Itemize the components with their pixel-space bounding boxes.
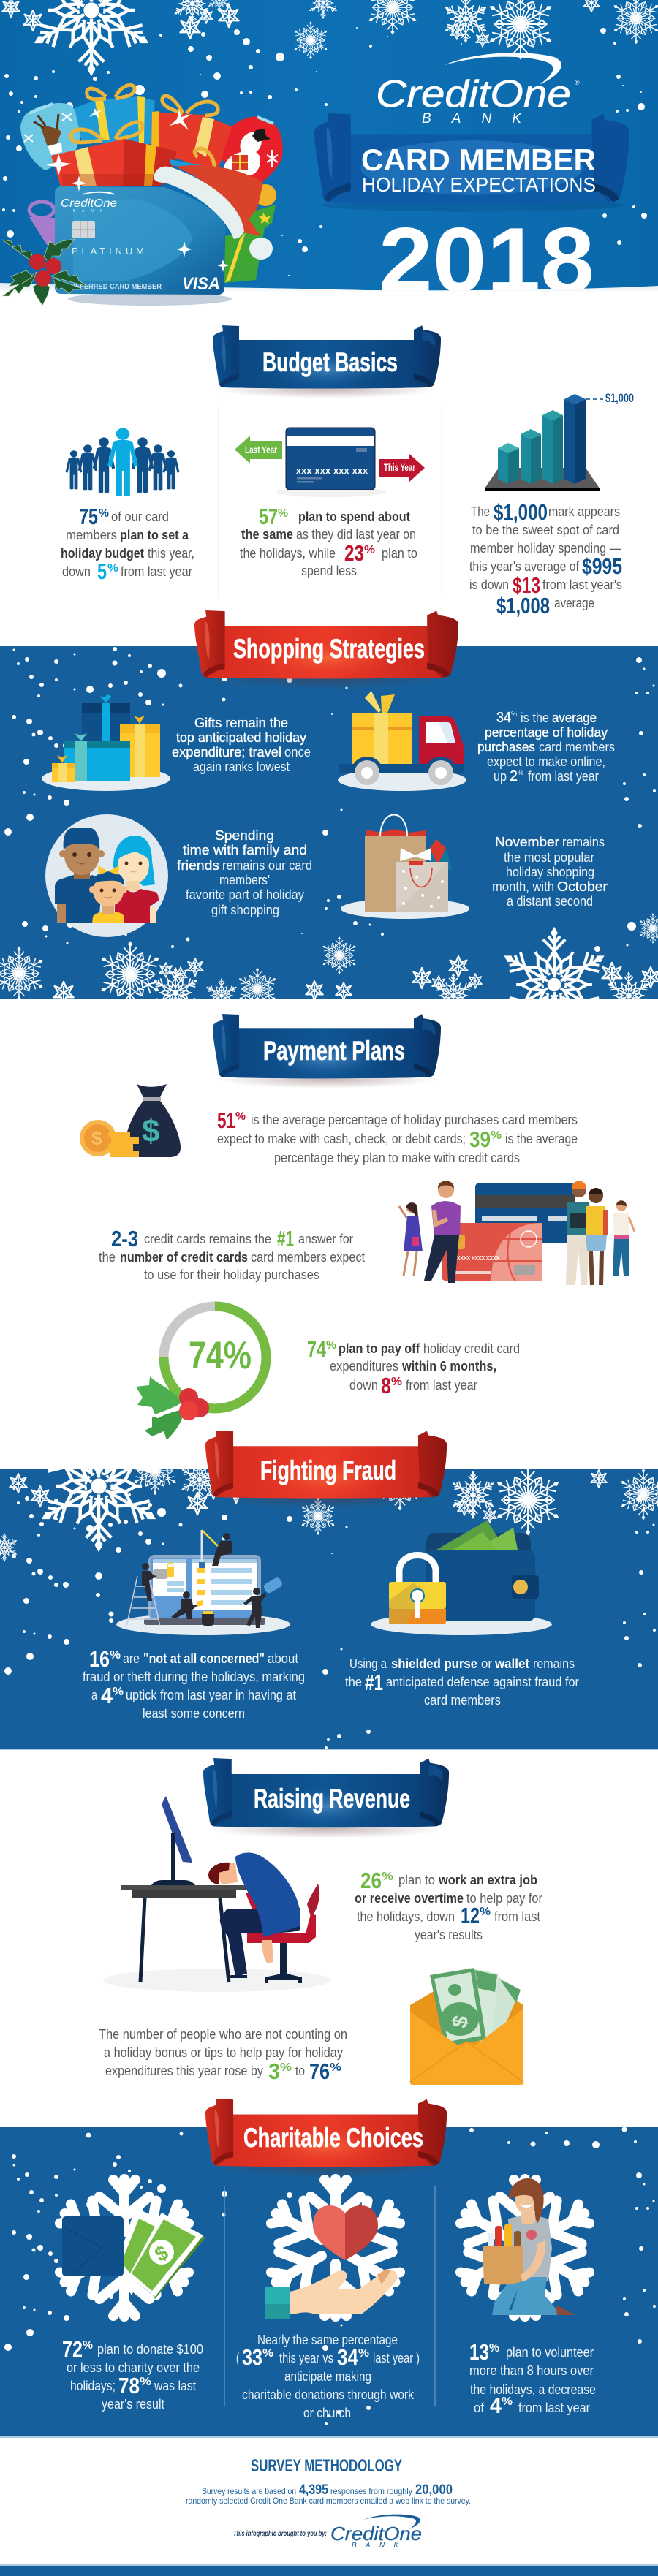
banner: card member holiday expectations (314, 113, 629, 211)
text: 26 percent extra job: work an extra job (438, 1872, 537, 1887)
arrow: last year: Last Year (245, 444, 277, 455)
text: 33 percent vs 34 percent: % (358, 2347, 369, 2360)
text: shielded purse or wallet: Using a (349, 1656, 387, 1671)
text: 75 percent set a budget: down (62, 564, 91, 579)
icon: money bag and coins: $ (142, 1113, 159, 1149)
text: 75 percent set a budget: 75 (79, 504, 98, 529)
text: shielded purse or wallet: the (345, 1674, 362, 1689)
text: 75 percent set a budget: 5 (97, 558, 107, 584)
text: 51 percent cash, 39 percent credit: is the average percentage of holiday purchases card members (251, 1112, 578, 1127)
text: 57 percent spend the same: as they did last year on (296, 526, 416, 542)
snow ground (0, 283, 658, 322)
text: 33 percent vs 34 percent (236, 2332, 420, 2420)
text: 33 percent vs 34 percent: ( (236, 2350, 240, 2365)
icon: snowflake with heart and hand (264, 2179, 407, 2319)
person: woman with phone (399, 1202, 423, 1276)
text: 34 percent online purchases: 2 (510, 768, 518, 784)
text: shielded purse or wallet: anticipated defense against fraud for (386, 1674, 579, 1689)
text: 16 percent not at all concerned: uptick from last year in having at (126, 1687, 296, 1702)
text: 57 percent spend the same: % (364, 544, 375, 556)
person: man with orange cap (566, 1181, 592, 1285)
hat brim and pompom (154, 167, 273, 260)
text: 74 percent pay off: down (349, 1377, 378, 1393)
text: 72 percent donate: % (140, 2376, 151, 2388)
text: 34 percent online purchases: up (494, 768, 507, 784)
title: year 2018: 2018 (379, 208, 594, 311)
text: gifts remain top expenditure: expenditure; travel (172, 744, 281, 759)
logo: Credit One Bank footer: CreditOne (330, 2523, 422, 2545)
text: 26 percent extra job: to help pay for (466, 1890, 542, 1906)
figure: child (89, 865, 127, 923)
text: 57 percent spend the same: plan to (382, 545, 417, 561)
logo: Credit One Bank (376, 53, 580, 126)
text: 16 percent not at all concerned: % (110, 1649, 121, 1662)
text: 2-3 credit cards (99, 1226, 365, 1282)
text: 34 percent online purchases: expect to make online, (487, 754, 605, 769)
text: 13 percent volunteer: of (474, 2400, 485, 2415)
gift: big red (51, 139, 214, 186)
heading: raising revenue (203, 1758, 449, 1838)
text: brought to you by: This infographic brought to you by: (233, 2530, 327, 2538)
text: 34 percent online purchases: purchases (477, 739, 535, 754)
heading: raising revenue: Raising Revenue (254, 1784, 410, 1814)
text: shielded purse or wallet: #1 (365, 1670, 383, 1695)
panel: charitable choices (0, 2099, 658, 2467)
text: 51 percent cash, 39 percent credit: 51 (217, 1107, 235, 1133)
gift: purple (29, 202, 55, 245)
text: 16 percent not at all concerned: 16 (89, 1646, 110, 1672)
arrow: last year (235, 436, 282, 463)
text: survey details: randomly selected Credit One Bank card members emailed a web link to the survey. (186, 2496, 471, 2506)
text: 26 percent extra job (355, 1868, 542, 1942)
text: no holiday bonus: 76 (309, 2058, 330, 2084)
figure: woman (113, 836, 159, 923)
credit card (55, 186, 226, 295)
icon: snowflake with volunteer woman (453, 2178, 597, 2316)
text: the 1000 dollar mark: is down (469, 577, 509, 592)
text: the 1000 dollar mark: to be the sweet spot of card (472, 522, 619, 537)
credit card: PREFERRED CARD MEMBER (66, 282, 162, 291)
icon: money bag and coins (80, 1084, 181, 1157)
text: 16 percent not at all concerned: are (123, 1651, 140, 1666)
text: 74 percent pay off: from last year (406, 1377, 477, 1393)
panel: fighting fraud (0, 1431, 658, 1750)
text: 16 percent not at all concerned: a (91, 1687, 98, 1702)
text: 75 percent set a budget: holiday budget (61, 545, 144, 561)
text: 34 percent online purchases: is the (521, 710, 549, 725)
heading: fighting fraud: Fighting Fraud (260, 1455, 396, 1485)
text: 57 percent spend the same: 23 (344, 540, 364, 566)
chart: 74 percent donut: 74% (189, 1334, 252, 1377)
text: 57 percent spend the same: % (278, 507, 288, 520)
text: 72 percent donate: or less to charity over the (67, 2360, 200, 2375)
panel: payment plans (0, 999, 658, 1469)
text: 34 percent online purchases: card members (539, 739, 615, 754)
text: 16 percent not at all concerned: least some concern (143, 1705, 245, 1721)
text: 72 percent donate: year's result (102, 2396, 164, 2412)
text: shielded purse or wallet: or (481, 1656, 492, 1671)
banner: card member holiday expectations: CARD MEMBER (361, 143, 596, 177)
banner: card member holiday expectations: HOLIDAY EXPECTATIONS (362, 173, 596, 196)
text: 74 percent pay off: 74 (307, 1336, 327, 1362)
text: 13 percent volunteer: from last year (518, 2400, 590, 2415)
logo: Credit One Bank: CreditOne (376, 73, 571, 115)
text: 75 percent set a budget: % (107, 562, 118, 575)
person: woman in yellow (586, 1188, 608, 1285)
text: no holiday bonus: % (280, 2061, 292, 2074)
icon: family portrait (45, 814, 168, 937)
text: 72 percent donate: 72 (62, 2336, 83, 2362)
text: 51 percent cash, 39 percent credit: percentage they plan to make with credit cards (274, 1150, 520, 1165)
text: 74 percent pay off: plan to pay off (339, 1341, 420, 1356)
heading: payment plans (213, 1014, 441, 1088)
text: 16 percent not at all concerned: "not at all concerned" (143, 1651, 265, 1666)
text: spending time with family: time with family and (183, 842, 307, 857)
heading: survey methodology: SURVEY METHODOLOGY (251, 2456, 402, 2476)
text: gifts remain top expenditure: top anticipated holiday (176, 730, 307, 745)
text: gifts remain top expenditure: once (284, 744, 311, 759)
person: man in white (613, 1200, 635, 1276)
text: 2-3 credit cards: answer for (298, 1231, 353, 1246)
text: 33 percent vs 34 percent: or church (303, 2405, 351, 2420)
text: spending time with family: gift shopping (211, 902, 279, 917)
text: 57 percent spend the same (240, 504, 417, 578)
icon: snowflake with cash envelope (53, 2179, 205, 2316)
text: 33 percent vs 34 percent: Nearly the same percentage (257, 2332, 398, 2347)
gift: blue (71, 85, 155, 144)
text: 57 percent spend the same: plan to spend about (298, 509, 410, 524)
panel: header (0, 0, 658, 322)
text: 16 percent not at all concerned: 4 (101, 1683, 113, 1708)
text: 2-3 credit cards: #1 (277, 1226, 294, 1251)
text: the 1000 dollar mark (469, 499, 622, 618)
text: 33 percent vs 34 percent: this year vs (279, 2350, 333, 2365)
icon: holly (136, 1376, 209, 1440)
icon: envelope with cash (410, 1968, 523, 2085)
text: 51 percent cash, 39 percent credit: % (235, 1110, 246, 1123)
text: november most popular: remains (562, 834, 605, 849)
text: 16 percent not at all concerned: about (268, 1651, 298, 1666)
panel: budget basics (0, 322, 658, 618)
text: no holiday bonus: a holiday bonus or tips to help pay for holiday (104, 2045, 344, 2060)
text: 74 percent pay off: % (326, 1339, 336, 1352)
text: 75 percent set a budget: from last year (121, 564, 192, 579)
text: 26 percent extra job: or receive overtime (355, 1890, 464, 1906)
text: shielded purse or wallet (345, 1656, 579, 1708)
text: 74 percent pay off (307, 1336, 520, 1398)
icon: envelope with cash: $ (447, 2013, 474, 2030)
text: survey details: 20,000 (415, 2482, 453, 2498)
text: 72 percent donate: % (83, 2339, 93, 2352)
heading: budget basics: Budget Basics (262, 347, 398, 377)
logo: Credit One Bank: ® (575, 79, 580, 86)
text: 51 percent cash, 39 percent credit (217, 1107, 578, 1165)
text: the 1000 dollar mark: this year's average of (469, 558, 580, 574)
text: 26 percent extra job: 12 (461, 1903, 480, 1928)
heading: payment plans: Payment Plans (263, 1036, 405, 1066)
icon: stacked gifts (42, 694, 170, 791)
text: november most popular: holiday shopping (506, 864, 594, 879)
text: 16 percent not at all concerned: % (113, 1686, 124, 1698)
sweater: reindeer (20, 103, 83, 170)
heading: fighting fraud (205, 1431, 447, 1509)
text: 75 percent set a budget: % (99, 507, 109, 520)
panel: raising revenue (0, 1750, 658, 2127)
text: 74 percent pay off: % (391, 1376, 402, 1388)
text: no holiday bonus (99, 2026, 347, 2084)
text: 26 percent extra job: from last (494, 1909, 540, 1924)
illustration: people and credit cards (399, 1181, 635, 1285)
credit card: VISA (182, 274, 220, 294)
text: 34 percent online purchases: 34 (496, 710, 511, 726)
text: 75 percent set a budget: members (66, 527, 117, 542)
icon: money bag and coins: $ (91, 1127, 102, 1149)
text: 33 percent vs 34 percent: 34 (337, 2344, 359, 2370)
chart: rising spending bars: $1,000 (605, 391, 634, 405)
gift: green (224, 205, 276, 283)
arrow: this year (379, 454, 425, 482)
text: no holiday bonus: expenditures this year rose by (105, 2063, 264, 2078)
text: 33 percent vs 34 percent: 33 (242, 2344, 262, 2370)
text: the 1000 dollar mark: from last year's (542, 577, 622, 592)
heading: charitable choices: Charitable Choices (243, 2123, 423, 2153)
text: 34 percent online purchases: % (518, 769, 523, 777)
chart: rising spending bars (485, 391, 634, 491)
text: 51 percent cash, 39 percent credit: expect to make with cash, check, or debit cards; (217, 1131, 466, 1146)
text: survey details: 4,395 (299, 2482, 328, 2498)
santa hat (175, 165, 263, 236)
text: spending time with family: friends (177, 857, 219, 873)
text: the 1000 dollar mark: $1,008 (496, 593, 550, 618)
heading: charitable choices (205, 2099, 447, 2178)
text: november most popular (492, 834, 608, 909)
text: shielded purse or wallet: shielded purse (391, 1656, 477, 1671)
text: gifts remain top expenditure: Gifts remain the (194, 715, 288, 730)
text: 26 percent extra job: the holidays, down (357, 1909, 455, 1924)
illustration: exhausted man at desk (103, 1796, 331, 1992)
person: man in purple (424, 1181, 461, 1283)
text: 26 percent extra job: plan to (398, 1872, 435, 1887)
text: november most popular: November (495, 834, 559, 849)
text: november most popular: the most popular (504, 849, 594, 865)
sweater: snowman (222, 117, 283, 181)
text: 2-3 credit cards: card members expect (251, 1249, 365, 1265)
text: 2-3 credit cards: the (99, 1249, 116, 1265)
text: spending time with family: Spending (215, 827, 274, 843)
icon: credit card with arrows (235, 428, 425, 497)
text: 72 percent donate: was last (154, 2378, 196, 2393)
text: survey details: responses from roughly (330, 2486, 412, 2496)
text: 2-3 credit cards: credit cards remains the (144, 1231, 271, 1246)
text: 2-3 credit cards: 2-3 (111, 1226, 138, 1251)
illustration: people and credit cards: XXXX XXXX XXXX (457, 1255, 500, 1262)
heading: budget basics (213, 325, 441, 398)
text: the 1000 dollar mark: The (471, 504, 490, 519)
text: 34 percent online purchases: percentage of holiday (485, 724, 608, 740)
text: 13 percent volunteer: % (489, 2342, 499, 2355)
sparkles (46, 108, 229, 272)
text: 13 percent volunteer: the holidays, a decrease (470, 2382, 596, 2397)
holly (2, 239, 88, 306)
icon: group of people (66, 428, 179, 496)
text: the 1000 dollar mark: $13 (513, 572, 540, 598)
text: spending time with family (177, 827, 312, 917)
text: gifts remain top expenditure: again ranks lowest (193, 759, 290, 774)
text: the 1000 dollar mark: $1,000 (494, 499, 548, 525)
text: 75 percent set a budget (61, 504, 194, 584)
illustration: wallet and padlock (371, 1520, 552, 1635)
text: 13 percent volunteer (469, 2339, 596, 2418)
chart: 74 percent donut (136, 1306, 266, 1440)
text: 57 percent spend the same: the same (241, 526, 293, 542)
text: 16 percent not at all concerned (83, 1646, 305, 1721)
text: 26 percent extra job: 26 (360, 1868, 382, 1893)
text: 75 percent set a budget: of our card (111, 509, 169, 524)
text: no holiday bonus: to (295, 2063, 305, 2078)
figure: man (55, 828, 105, 923)
text: spending time with family: members' (219, 872, 270, 887)
illustration: thieves at laptop (116, 1530, 290, 1635)
text: 13 percent volunteer: 13 (469, 2339, 489, 2365)
text: 26 percent extra job: % (480, 1906, 491, 1918)
text: shielded purse or wallet: card members (424, 1692, 501, 1708)
heading: shopping strategies (194, 610, 458, 689)
text: 13 percent volunteer: more than 8 hours over (469, 2363, 594, 2378)
text: 57 percent spend the same: the holidays, while (240, 545, 336, 561)
text: november most popular: a distant second (507, 893, 593, 909)
text: the 1000 dollar mark: $995 (582, 553, 622, 579)
text: 26 percent extra job: % (382, 1871, 393, 1883)
text: 34 percent online purchases: from last year (528, 768, 599, 784)
text: no holiday bonus: 3 (268, 2058, 280, 2084)
text: 33 percent vs 34 percent: % (262, 2347, 273, 2360)
text: 16 percent not at all concerned: fraud or theft during the holidays, marking (83, 1669, 305, 1684)
text: 34 percent online purchases: % (511, 711, 517, 719)
text: survey details (186, 2482, 471, 2506)
text: november most popular: October (557, 879, 608, 894)
credit card: BANK (73, 209, 103, 213)
text: 74 percent pay off: 8 (381, 1373, 391, 1398)
heading: shopping strategies: Shopping Strategies (233, 634, 425, 664)
text: 75 percent set a budget: plan to set a (120, 527, 189, 542)
text: 33 percent vs 34 percent: last year ) (373, 2350, 420, 2365)
text: 57 percent spend the same: spend less (301, 563, 357, 578)
panel: survey methodology footer (0, 2436, 658, 2576)
gift: red (151, 96, 232, 172)
text: 72 percent donate: holidays; (70, 2378, 116, 2393)
icon: credit card with arrows: xxx xxx xxx xxx (296, 466, 368, 476)
text: 34 percent online purchases (477, 710, 615, 784)
logo: Credit One Bank: BANK (422, 111, 522, 126)
icon: delivery truck with gift (338, 691, 466, 791)
text: 74 percent pay off: holiday credit card (423, 1341, 520, 1356)
text: spending time with family: remains our card (222, 857, 312, 873)
text: 51 percent cash, 39 percent credit: % (491, 1129, 502, 1142)
text: 75 percent set a budget: this year, (148, 545, 194, 561)
text: 33 percent vs 34 percent: anticipate making (284, 2368, 371, 2384)
text: the 1000 dollar mark: mark appears (548, 504, 620, 519)
text: 72 percent donate (62, 2336, 203, 2412)
text: shielded purse or wallet: remains (533, 1656, 575, 1671)
text: shielded purse or wallet: wallet (494, 1656, 529, 1671)
icon: snowflake with cash envelope: $ (151, 2240, 173, 2266)
text: 13 percent volunteer: % (502, 2395, 513, 2408)
text: 74 percent pay off: expenditures (330, 1358, 398, 1374)
text: gifts remain top expenditure (172, 715, 311, 774)
text: the 1000 dollar mark: average (554, 595, 594, 610)
text: the 1000 dollar mark: member holiday spending — (470, 540, 621, 556)
text: 74 percent pay off: within 6 months, (401, 1358, 496, 1374)
illustration: gifts, santa hat and credit card (2, 85, 283, 306)
footer band (0, 2564, 658, 2576)
text: 57 percent spend the same: 57 (259, 504, 278, 529)
logo: Credit One Bank footer (330, 2515, 422, 2550)
credit card: CreditOne (61, 197, 117, 210)
text: november most popular: month, with (492, 879, 554, 894)
text: spending time with family: favorite part of holiday (186, 887, 305, 902)
credit card: PLATINUM (72, 246, 144, 257)
text: 34 percent online purchases: average (552, 710, 597, 725)
text: 72 percent donate: plan to donate $100 (97, 2341, 203, 2357)
text: no holiday bonus: % (330, 2061, 341, 2074)
icon: shopping bags (341, 814, 469, 919)
text: 2-3 credit cards: number of credit cards (120, 1249, 248, 1265)
text: 72 percent donate: 78 (118, 2373, 140, 2398)
arrow: this year: This Year (384, 461, 415, 473)
text: 13 percent volunteer: plan to volunteer (506, 2344, 594, 2360)
text: no holiday bonus: The number of people who are not counting on (99, 2026, 347, 2042)
text: 51 percent cash, 39 percent credit: 39 (469, 1126, 491, 1152)
panel: shopping strategies (0, 610, 658, 999)
text: survey details: Survey results are based on (202, 2486, 296, 2496)
text: 51 percent cash, 39 percent credit: is the average (505, 1131, 578, 1146)
text: 33 percent vs 34 percent: charitable donations through work (242, 2387, 415, 2402)
text: 2-3 credit cards: to use for their holiday purchases (144, 1267, 319, 1282)
text: 13 percent volunteer: 4 (490, 2393, 502, 2418)
logo: Credit One Bank footer: BANK (352, 2542, 399, 2550)
text: 26 percent extra job: year's results (415, 1927, 483, 1942)
